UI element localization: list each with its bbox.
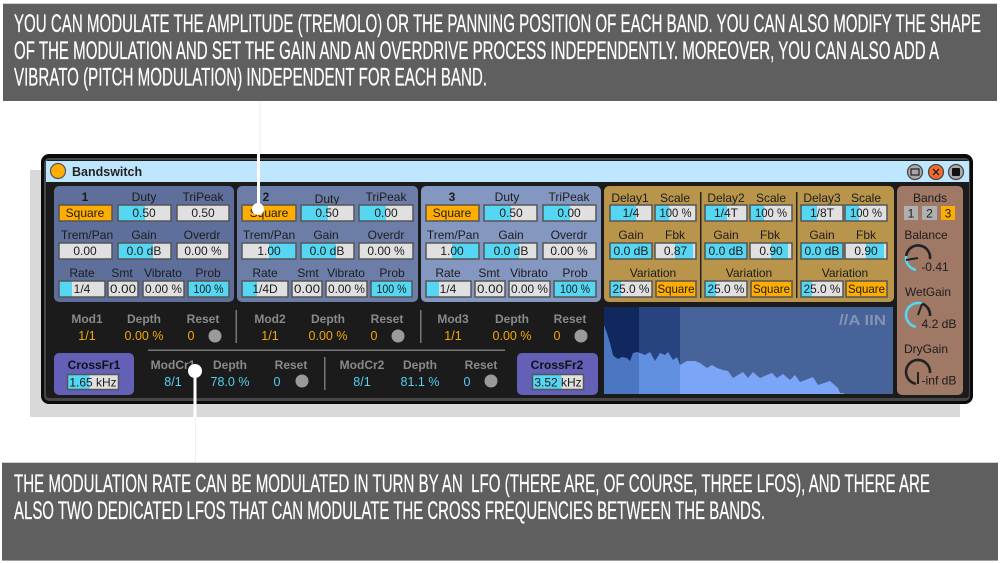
panel: delays: Delay3: [803, 191, 841, 205]
panel: band 3: 1/4: [440, 282, 457, 296]
panel: delays: 100 %: [850, 206, 882, 220]
LFO row: Mod1 Mod2 Mod3: 0.00 %: [309, 329, 347, 343]
panel: bands and gains: DryGain: [904, 342, 948, 356]
panel: delays: 100 %: [660, 206, 692, 220]
panel: band 2: Overdr: [368, 228, 404, 242]
panel: delays: Fbk: [760, 228, 781, 242]
panel: band 3: 100 %: [560, 282, 590, 296]
panel: band 2: Smt: [297, 266, 319, 280]
LFO row: Mod1 Mod2 Mod3: 1/1: [261, 329, 279, 343]
panel: band 3: [421, 186, 601, 302]
panel: bands and gains: 1: [908, 206, 915, 220]
cross-frequency LFO row: ModCr1 ModCr2: 78.0 %: [211, 375, 249, 389]
panel: delays: Scale: [756, 191, 786, 205]
panel: band 2: 0.00 %: [328, 282, 365, 296]
panel: band 1: Smt: [111, 266, 133, 280]
panel: delays: Variation: [726, 266, 772, 280]
panel: band 2: 1.00: [257, 244, 281, 258]
title bar: Bandswitch: [72, 165, 142, 179]
panel: band 1: TriPeak: [183, 190, 224, 204]
panel: band 3: 0.00 %: [511, 282, 548, 296]
device: Bandswitch: [41, 154, 973, 404]
cross-frequency LFO row: ModCr1 ModCr2: 81.1 %: [401, 375, 439, 389]
panel: delays: Gain: [713, 228, 739, 242]
panel: band 1: Square: [66, 206, 105, 220]
top explanation banner: [3, 3, 997, 101]
panel: bands and gains: 2: [926, 206, 933, 220]
panel: band 3: Square: [433, 206, 472, 220]
panel: band 1: 0.50: [191, 206, 215, 220]
bottom explanation banner: [2, 462, 998, 561]
control: CrossFr1: CrossFr1: [68, 358, 121, 372]
LFO row: Mod1 Mod2 Mod3: Mod1: [71, 312, 103, 326]
panel: delays: Scale: [660, 191, 690, 205]
panel: delays: Variation: [630, 266, 676, 280]
LFO row: Mod1 Mod2 Mod3: Reset: [554, 312, 586, 326]
panel: bands and gains: -0.41: [921, 260, 949, 274]
panel: bands and gains: 3: [945, 206, 952, 220]
panel: band 1: 100 %: [194, 282, 224, 296]
panel: bands and gains: Balance: [904, 228, 948, 242]
panel: delays: Gain: [809, 228, 835, 242]
panel: band 2: Square: [250, 206, 289, 220]
panel: delays: 1/4: [623, 206, 640, 220]
panel: band 3: TriPeak: [549, 190, 590, 204]
panel: delays: 0.90: [854, 244, 878, 258]
panel: delays: 0.90: [759, 244, 783, 258]
panel: delays: [604, 186, 894, 302]
panel: band 1: Rate: [69, 266, 95, 280]
LFO row: Mod1 Mod2 Mod3: Depth: [495, 312, 529, 326]
cross-frequency LFO row: ModCr1 ModCr2: Depth: [403, 358, 437, 372]
LFO row: Mod1 Mod2 Mod3: 0: [188, 329, 195, 343]
panel: band 2: Vibrato: [327, 266, 365, 280]
panel: delays: Variation: [822, 266, 868, 280]
panel: band 1: 0.00: [110, 282, 136, 296]
panel: band 2: 0.00 %: [367, 244, 405, 258]
panel: band 2: Gain: [313, 228, 339, 242]
control: CrossFr2: CrossFr2: [531, 358, 584, 372]
panel: band 2: [237, 186, 418, 302]
callout line: top annotation to Square: [252, 101, 264, 215]
panel: band 2: Rate: [252, 266, 278, 280]
LFO row: Mod1 Mod2 Mod3: Mod2: [254, 312, 286, 326]
panel: delays: 1/8T: [810, 206, 835, 220]
panel: delays: 25.0 %: [804, 282, 841, 296]
panel: band 1: 0.00 %: [184, 244, 222, 258]
panel: band 1: 0.00: [73, 244, 97, 258]
panel: band 1: Overdr: [184, 228, 220, 242]
spectrum display: [604, 307, 893, 394]
callout line: bottom annotation to ModCr1: [188, 364, 202, 462]
panel: band 3: 0.0 dB: [494, 244, 528, 258]
panel: delays: Fbk: [856, 228, 877, 242]
top explanation banner: VIBRATO (PITCH MODULATION) INDEPENDENT FOR EACH BAND.: [14, 64, 487, 92]
panel: band 3: 0.00 %: [550, 244, 588, 258]
LFO row: Mod1 Mod2 Mod3: 1/1: [444, 329, 462, 343]
panel: delays: 1/4T: [714, 206, 739, 220]
cross-frequency LFO row: ModCr1 ModCr2: Reset: [275, 358, 307, 372]
panel: band 2: TriPeak: [366, 190, 407, 204]
panel: band 2: 0.00: [374, 206, 398, 220]
LFO row: Mod1 Mod2 Mod3: Depth: [311, 312, 345, 326]
panel: band 1: 0.0 dB: [127, 244, 161, 258]
panel: band 2: Trem/Pan: [243, 228, 295, 242]
LFO row: Mod1 Mod2 Mod3: Depth: [127, 312, 161, 326]
panel: band 2: 1/4D: [252, 282, 278, 296]
LFO row: Mod1 Mod2 Mod3: 0: [371, 329, 378, 343]
panel: bands and gains: 4.2 dB: [922, 317, 956, 331]
panel: delays: Square: [658, 282, 695, 296]
panel: delays: 25.0 %: [612, 282, 650, 296]
panel: band 2: 0.00: [294, 282, 320, 296]
panel: bands and gains: [897, 186, 963, 395]
panel: band 3: 0.50: [499, 206, 523, 220]
panel: delays: 0.0 dB: [804, 244, 840, 258]
panel: delays: Delay1: [611, 191, 649, 205]
device drop shadow: [30, 170, 960, 417]
panel: band 3: 0.00: [477, 282, 503, 296]
panel: band 1: 0.00 %: [145, 282, 182, 296]
control: CrossFr1: 1.65 kHz: [69, 376, 117, 390]
LFO row: Mod1 Mod2 Mod3: [71, 310, 588, 343]
LFO row: Mod1 Mod2 Mod3: 0: [554, 329, 561, 343]
panel: band 3: 0.00: [557, 206, 581, 220]
panel: bands and gains: -inf dB: [922, 374, 956, 388]
cross-frequency LFO row: ModCr1 ModCr2: ModCr2: [340, 358, 385, 372]
panel: band 3: Vibrato: [510, 266, 548, 280]
panel: band 3: Rate: [435, 266, 461, 280]
panel: delays: 25.0 %: [708, 282, 745, 296]
panel: delays: 0.0 dB: [614, 244, 648, 258]
panel: delays: 100 %: [755, 206, 787, 220]
panel: band 1: Vibrato: [144, 266, 182, 280]
panel: band 3: 3: [449, 190, 456, 204]
cross-frequency LFO row: ModCr1 ModCr2: 0: [464, 375, 471, 389]
panel: band 2: Duty: [315, 192, 339, 206]
control: CrossFr2: 3.52 kHz: [534, 376, 582, 390]
panel: bands and gains: WetGain: [905, 285, 951, 299]
LFO row: Mod1 Mod2 Mod3: Reset: [187, 312, 219, 326]
cross-frequency LFO row: ModCr1 ModCr2: 8/1: [353, 375, 371, 389]
panel: delays: Fbk: [665, 228, 686, 242]
panel: delays: 0.87: [664, 244, 688, 258]
panel: band 1: Prob: [195, 266, 221, 280]
LFO row: Mod1 Mod2 Mod3: Reset: [371, 312, 403, 326]
panel: band 3: Overdr: [551, 228, 587, 242]
panel: band 3: Smt: [478, 266, 500, 280]
panel: band 3: 1.00: [440, 244, 464, 258]
panel: band 2: Prob: [379, 266, 405, 280]
panel: band 1: [54, 186, 234, 302]
panel: band 1: 1/4: [74, 282, 91, 296]
cross-frequency LFO row: ModCr1 ModCr2: ModCr1: [151, 358, 196, 372]
panel: band 2: 100 %: [376, 282, 407, 296]
control: CrossFr2: [517, 353, 598, 395]
panel: band 2: 0.0 dB: [310, 244, 344, 258]
panel: band 3: Duty: [495, 190, 519, 204]
panel: delays: Delay2: [707, 191, 745, 205]
LFO row: Mod1 Mod2 Mod3: 0.00 %: [125, 329, 163, 343]
cross-frequency LFO row: ModCr1 ModCr2: 0: [274, 375, 281, 389]
cross-frequency LFO row: ModCr1 ModCr2: Reset: [465, 358, 497, 372]
control: CrossFr1: [54, 353, 134, 395]
panel: delays: Square: [848, 282, 885, 296]
panel: delays: Gain: [618, 228, 644, 242]
cross-frequency LFO row: ModCr1 ModCr2: 8/1: [164, 375, 182, 389]
panel: band 1: 1: [82, 190, 89, 204]
panel: band 1: Trem/Pan: [61, 228, 113, 242]
panel: delays: 0.0 dB: [708, 244, 744, 258]
panel: band 1: 0.50: [132, 206, 156, 220]
title bar: [46, 161, 969, 182]
LFO row: Mod1 Mod2 Mod3: 1/1: [78, 329, 96, 343]
spectrum display: //A IIN: [839, 312, 886, 329]
panel: band 3: Gain: [498, 228, 524, 242]
panel: band 1: Gain: [131, 228, 157, 242]
panel: band 3: Trem/Pan: [427, 228, 479, 242]
cross-frequency LFO row: ModCr1 ModCr2: [151, 357, 498, 390]
panel: bands and gains: Bands: [913, 191, 947, 205]
panel: band 2: 2: [263, 190, 270, 204]
cross-frequency LFO row: ModCr1 ModCr2: Depth: [213, 358, 247, 372]
panel: delays: Scale: [851, 191, 881, 205]
panel: band 3: Prob: [562, 266, 588, 280]
panel: band 1: Duty: [132, 190, 156, 204]
panel: band 2: 0.50: [315, 206, 339, 220]
panel: delays: Square: [753, 282, 790, 296]
LFO row: Mod1 Mod2 Mod3: 0.00 %: [493, 329, 531, 343]
LFO row: Mod1 Mod2 Mod3: Mod3: [437, 312, 469, 326]
